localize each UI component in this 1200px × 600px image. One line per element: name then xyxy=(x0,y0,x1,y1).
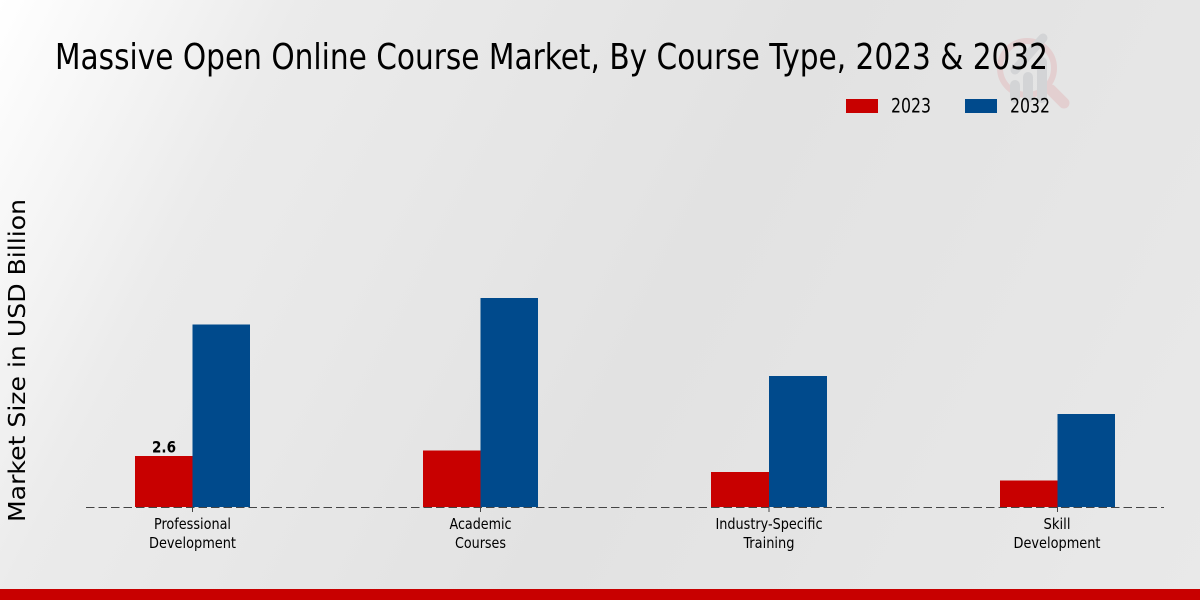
category label: Professional Development xyxy=(149,515,236,552)
legend xyxy=(846,94,1050,118)
category label: Skill Development xyxy=(1014,515,1101,552)
category label: Industry-Specific Training: Training xyxy=(743,534,794,552)
category label: Skill Development: Skill xyxy=(1044,515,1070,533)
category label: Industry-Specific Training: Industry-Specific xyxy=(716,515,822,533)
y-axis title: Market Size in USD Billion xyxy=(3,199,31,522)
legend label: 2023: 2023 xyxy=(891,94,931,118)
category label: Academic Courses xyxy=(450,515,512,552)
bars: Professional Development xyxy=(135,324,250,507)
legend label: 2032: 2032 xyxy=(1010,94,1050,118)
category label: Professional Development: Professional xyxy=(154,515,231,533)
category label: Academic Courses: Courses xyxy=(455,534,506,552)
bars: Industry-Specific Training xyxy=(711,376,827,507)
category label: Professional Development: Development xyxy=(149,534,236,552)
x-axis baseline xyxy=(86,506,1164,508)
watermark logo xyxy=(1000,38,1064,103)
title: Massive Open Online Course Market, By Course Type, 2023 & 2032 xyxy=(55,37,1048,78)
legend swatch: 2023 xyxy=(846,99,878,113)
category label: Skill Development: Development xyxy=(1014,534,1101,552)
category label: Industry-Specific Training xyxy=(716,515,822,552)
bars: Skill Development xyxy=(1000,414,1115,507)
footer bar xyxy=(0,589,1200,600)
legend swatch: 2032 xyxy=(965,99,997,113)
tick marks xyxy=(192,507,1058,512)
data label: 2.6 xyxy=(152,438,176,456)
category label: Academic Courses: Academic xyxy=(450,515,512,533)
bars: Academic Courses xyxy=(423,298,538,507)
